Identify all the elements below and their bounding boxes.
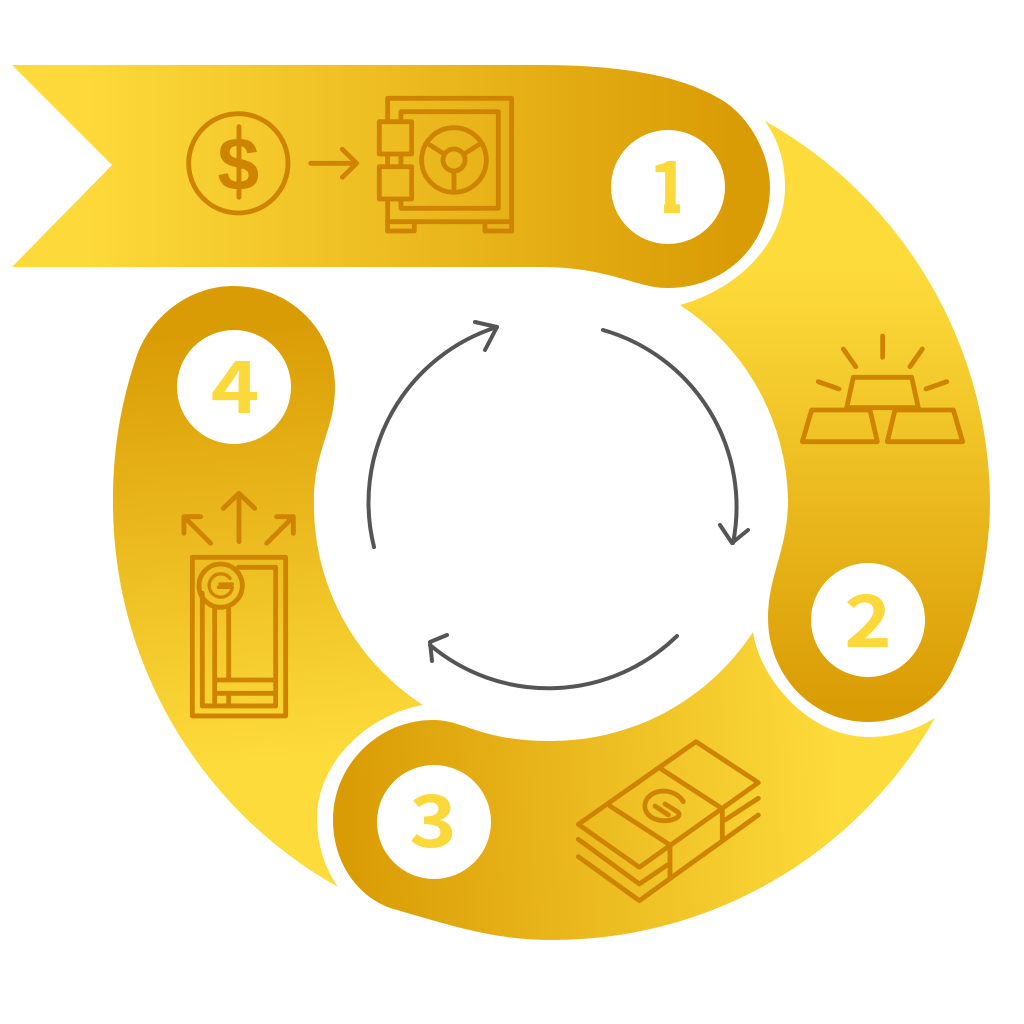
step 1 number badge: 1 [648,129,690,234]
step 2 number badge [811,563,925,677]
icon: stack of banknotes [578,742,758,901]
step 4 number badge: 4 [211,330,259,434]
icon: dollar coin, arrow and safe [189,98,512,231]
step 4 number badge [177,330,291,444]
arrow: cycle arrow right [603,330,748,543]
icon: dollar coin, arrow and safe: $ [217,122,259,206]
step 1 number badge [611,129,725,244]
icon: gold card with arrows [184,493,293,716]
panel: step 2 segment [680,121,990,722]
panel: step 3 segment [333,632,935,940]
panel: step 4 segment [113,286,423,887]
step 2 number badge: 2 [844,564,892,669]
arrow: cycle arrow bottom [430,635,677,688]
panel: step 1 ribbon [12,65,770,288]
arrow: cycle arrow top left [369,322,497,547]
step 3 number badge [377,764,491,879]
icon: gold bars [802,336,963,442]
step 3 number badge: 3 [409,764,457,869]
